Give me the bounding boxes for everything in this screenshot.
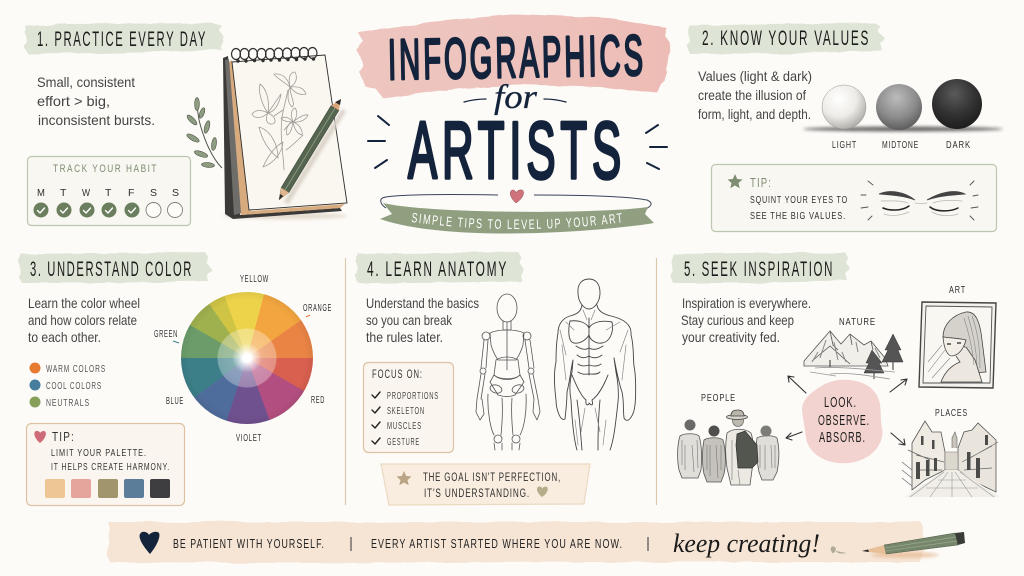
body text: small consistent effort — [37, 74, 155, 128]
focus card: MUSCLES — [387, 421, 422, 432]
title: for with side rules — [464, 79, 566, 116]
panel: 3. understand color — [18, 252, 332, 506]
arrows from center — [786, 376, 907, 445]
wheel labels: GREEN — [154, 328, 178, 340]
wheel labels: RED — [311, 394, 325, 406]
legend: color groups — [30, 362, 106, 409]
goal banner: THE GOAL ISN'T PERFECTION, — [423, 472, 561, 484]
icon: small heart with line — [831, 547, 846, 553]
central blob: look observe absorb: OBSERVE. — [818, 412, 870, 429]
wheel labels: VIOLET — [236, 432, 262, 444]
central blob: look observe absorb — [802, 380, 882, 463]
legend: color groups: COOL COLORS — [46, 381, 102, 392]
decorative rays — [368, 116, 667, 169]
focus card: SKELETON — [387, 406, 425, 417]
body text: anatomy: Understand the basics — [366, 295, 479, 311]
habit tracker card: S — [150, 187, 158, 199]
body text: color wheel: and how colors relate — [28, 312, 137, 328]
tip card: squint — [712, 164, 996, 232]
habit tracker card: T — [105, 187, 113, 199]
wheel labels — [154, 273, 332, 444]
body text: inspiration: Inspiration is everywhere. — [682, 295, 811, 311]
tip card: squint: TIP: — [750, 175, 772, 190]
heading brush: learn anatomy — [355, 252, 524, 283]
wheel labels: ORANGE — [303, 302, 332, 314]
palette swatches — [45, 479, 170, 498]
habit tracker card: T — [60, 187, 68, 199]
body text: small consistent effort: effort > big, — [37, 93, 110, 109]
heading brush: know your values — [687, 23, 885, 54]
panel: 5. seek inspiration — [670, 253, 1000, 497]
sketch: city street — [902, 421, 1000, 497]
body text: values: form, light, and depth. — [698, 106, 811, 122]
spheres: light midtone dark — [803, 79, 1003, 151]
footer banner: EVERY ARTIST STARTED WHERE YOU ARE NOW. — [371, 536, 623, 551]
body text: color wheel: Learn the color wheel — [28, 295, 140, 311]
heading brush: practice every day — [24, 23, 225, 54]
title: for with side rules: for — [494, 79, 538, 116]
icon: footer pencil — [862, 532, 965, 558]
spheres: light midtone dark: LIGHT — [832, 139, 857, 151]
body text: values: create the illusion of — [698, 87, 806, 103]
sketch: mountains and trees — [804, 331, 903, 379]
tip card: palette: IT HELPS CREATE HARMONY. — [51, 462, 170, 473]
heading brush: know your values: 2. KNOW YOUR VALUES — [702, 27, 870, 50]
tip card: palette: TIP: — [52, 429, 75, 444]
spheres: light midtone dark: DARK — [946, 139, 971, 151]
habit tracker card: TRACK YOUR HABIT — [53, 163, 158, 175]
label: people: PEOPLE — [701, 392, 736, 404]
tagline ribbon: SIMPLE TIPS TO LEVEL UP YOUR ART — [412, 213, 622, 229]
wheel labels: BLUE — [166, 395, 184, 407]
footer banner: BE PATIENT WITH YOURSELF. — [173, 536, 325, 551]
habit tracker card: M — [37, 187, 46, 199]
icon: navy heart — [140, 532, 159, 554]
tip card: squint: SEE THE BIG VALUES. — [750, 210, 846, 222]
icon: heart — [537, 486, 548, 497]
icon: heart — [34, 431, 46, 443]
body text: values — [698, 68, 812, 122]
body text: small consistent effort: Small, consistent — [37, 74, 135, 90]
heading brush: learn anatomy: 4. LEARN ANATOMY — [367, 258, 508, 281]
panel: title — [356, 14, 670, 234]
central blob: look observe absorb: LOOK. — [824, 394, 857, 411]
body text: color wheel — [28, 295, 140, 345]
heading brush: seek inspiration — [670, 253, 850, 283]
icon: leaf sprig — [186, 98, 222, 168]
icon: star — [728, 174, 742, 188]
focus card: FOCUS ON: — [372, 367, 423, 381]
flower sketch — [252, 72, 308, 170]
figure: mannequin — [476, 294, 540, 450]
heading brush: understand color: 3. UNDERSTAND COLOR — [30, 258, 193, 281]
focus card: GESTURE — [387, 437, 420, 448]
label: places: PLACES — [935, 407, 968, 419]
goal banner: IT'S UNDERSTANDING. — [424, 488, 530, 500]
legend: color groups: NEUTRALS — [46, 398, 90, 409]
panel: 1. practice every day — [24, 23, 347, 226]
spiral binding — [232, 48, 317, 63]
tagline ribbon — [380, 194, 654, 234]
body text: values: Values (light & dark) — [698, 68, 812, 84]
body text: anatomy: so you can break — [366, 312, 453, 328]
label: art: ART — [949, 284, 966, 296]
sketch: group of people — [678, 410, 779, 485]
panel: 2. know your values — [687, 23, 1003, 232]
section dividers — [346, 258, 656, 505]
footer banner — [106, 522, 965, 563]
panel: 4. learn anatomy — [355, 252, 636, 505]
tip card: squint: SQUINT YOUR EYES TO — [750, 194, 848, 206]
label: nature: NATURE — [839, 316, 876, 328]
title: artists: ARTISTS — [408, 106, 626, 196]
body text: inspiration: Stay curious and keep — [681, 312, 794, 328]
color wheel — [181, 292, 313, 424]
title: infographics: INFOGRAPHICS — [387, 24, 647, 92]
footer banner: keep creating! — [673, 529, 820, 558]
focus card: PROPORTIONS — [387, 391, 439, 402]
legend: color groups: WARM COLORS — [46, 364, 106, 375]
icon: sketchbook with flower and pencil — [223, 48, 347, 220]
body text: anatomy — [366, 295, 479, 345]
focus card — [364, 362, 454, 452]
goal banner — [381, 464, 590, 505]
body text: inspiration: your creativity fed. — [682, 329, 780, 345]
central blob: look observe absorb: ABSORB. — [819, 429, 866, 446]
body text: color wheel: to each other. — [28, 329, 101, 345]
title brush background — [357, 14, 670, 98]
figure: muscular body — [554, 279, 636, 450]
body text: small consistent effort: inconsistent bursts. — [38, 112, 155, 128]
habit tracker card: F — [128, 187, 136, 199]
habit tracker card: W — [82, 187, 91, 199]
heading brush: practice every day: 1. PRACTICE EVERY DAY — [37, 28, 207, 51]
tip card: palette: LIMIT YOUR PALETTE. — [51, 448, 147, 459]
habit check marks — [34, 202, 182, 218]
icon: heart — [510, 190, 524, 203]
habit tracker card — [28, 156, 190, 226]
heading brush: seek inspiration: 5. SEEK INSPIRATION — [684, 258, 834, 281]
wheel labels: YELLOW — [240, 273, 269, 285]
body text: inspiration — [681, 295, 811, 345]
heading brush: understand color — [18, 252, 212, 283]
sketch: framed portrait — [919, 302, 996, 388]
habit tracker card: S — [172, 187, 180, 199]
icon: star — [396, 471, 412, 485]
icon: squinting eyes — [861, 181, 978, 220]
pencil — [279, 99, 344, 203]
check marks — [372, 392, 380, 444]
body text: anatomy: the rules later. — [366, 329, 443, 345]
spheres: light midtone dark: MIDTONE — [882, 139, 919, 151]
tip card: palette — [26, 424, 184, 506]
